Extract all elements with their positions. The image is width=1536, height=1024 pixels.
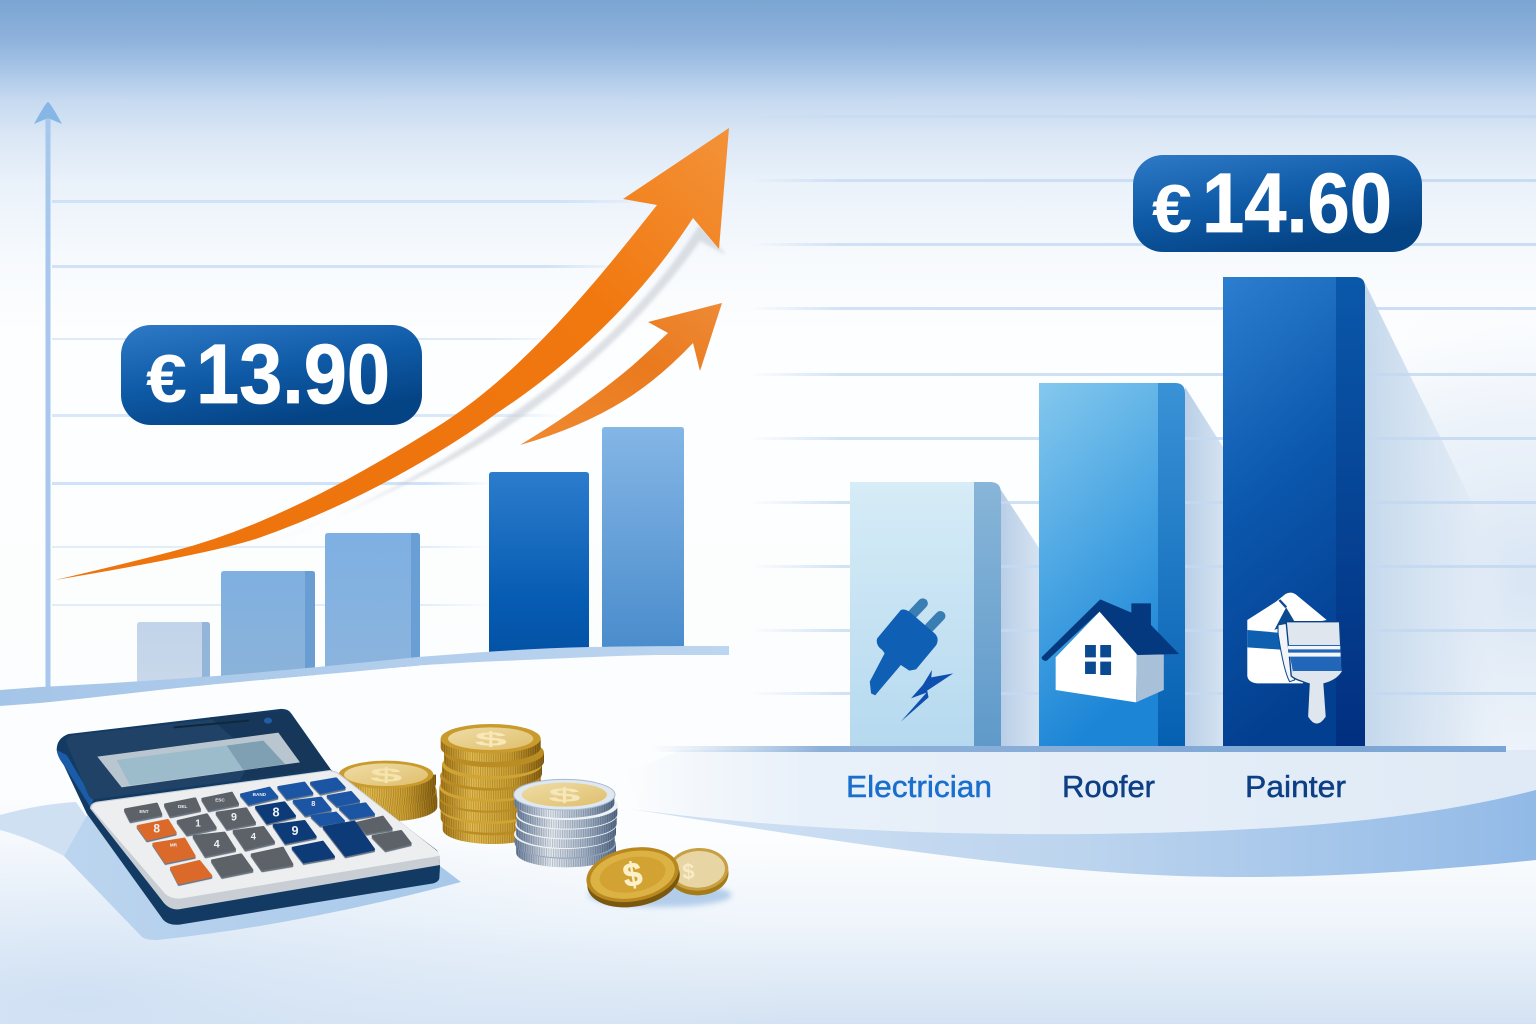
label: Electrician: Electrician bbox=[846, 769, 992, 804]
calculator shadow bbox=[0, 802, 461, 940]
back coin bbox=[667, 846, 730, 897]
calculator screen bbox=[97, 733, 300, 787]
key labels: ESC bbox=[215, 797, 225, 802]
icon: house bbox=[1041, 599, 1179, 702]
bar 2 bbox=[221, 571, 315, 680]
large orange arrow bbox=[55, 128, 729, 580]
bar 4 bbox=[489, 472, 589, 654]
small orange arrow bbox=[520, 303, 722, 445]
coin stack behind calculator: $ bbox=[370, 764, 402, 786]
tall gold coin stack: $ bbox=[474, 728, 507, 750]
price badge 14.60: 14.60 bbox=[1202, 156, 1392, 250]
key labels: 9 bbox=[291, 824, 299, 838]
key labels: DEL bbox=[178, 804, 187, 809]
key labels: BAND bbox=[253, 792, 267, 797]
bar 1 bbox=[137, 622, 210, 686]
key labels: 1 bbox=[195, 819, 201, 830]
key labels: 8 bbox=[311, 799, 315, 808]
key labels: MR bbox=[170, 843, 178, 848]
price badge 13.90: 13.90 bbox=[196, 327, 390, 421]
key labels: 9 bbox=[231, 812, 237, 824]
pale area above lower wave bbox=[620, 750, 1536, 834]
tall gold coin stack bbox=[439, 724, 544, 844]
price badge 13.90: € bbox=[146, 341, 187, 417]
label: Roofer: Roofer bbox=[1062, 769, 1155, 804]
wave swoosh right bbox=[630, 790, 1536, 877]
left bar chart bbox=[137, 427, 684, 686]
flat gold coins bbox=[582, 840, 732, 914]
painter bar bbox=[1223, 277, 1365, 746]
white hill under ground band bbox=[0, 655, 729, 800]
key labels bbox=[139, 792, 315, 850]
y axis arrow bbox=[34, 102, 62, 700]
calculator keys bbox=[125, 779, 410, 883]
silver coin stack: $ bbox=[548, 784, 581, 806]
key labels: ENT bbox=[139, 809, 149, 814]
key labels: 4 bbox=[251, 831, 257, 841]
ground band left bbox=[0, 646, 729, 706]
price badge 13.90 bbox=[121, 325, 422, 425]
price badge 14.60: € bbox=[1152, 171, 1192, 247]
calculator display panel bbox=[66, 711, 330, 799]
key labels: 4 bbox=[214, 838, 220, 850]
key labels: 8 bbox=[153, 822, 160, 836]
front coin bbox=[582, 840, 684, 914]
front coin: $ bbox=[620, 856, 646, 895]
icon: paint can and brush bbox=[1247, 593, 1342, 724]
baseline right bbox=[650, 746, 1506, 752]
electrician bar bbox=[850, 482, 1001, 746]
calculator face bbox=[90, 770, 440, 909]
silver coin stack bbox=[514, 779, 618, 867]
large orange arrow shadow bbox=[267, 224, 726, 544]
gridlines right bbox=[750, 115, 1536, 695]
calculator body bbox=[57, 709, 440, 925]
icon: plug bbox=[870, 603, 953, 722]
key labels: 8 bbox=[272, 806, 280, 820]
roofer bar bbox=[1039, 383, 1185, 746]
bar 5 bbox=[602, 427, 684, 650]
bar shadows right bbox=[1001, 283, 1510, 746]
coin stack behind calculator bbox=[335, 761, 437, 821]
bar 3 bbox=[325, 533, 420, 668]
label: Painter: Painter bbox=[1245, 769, 1346, 804]
gridlines left bbox=[52, 200, 652, 606]
calculator bbox=[57, 709, 440, 925]
back coin: $ bbox=[682, 859, 695, 884]
